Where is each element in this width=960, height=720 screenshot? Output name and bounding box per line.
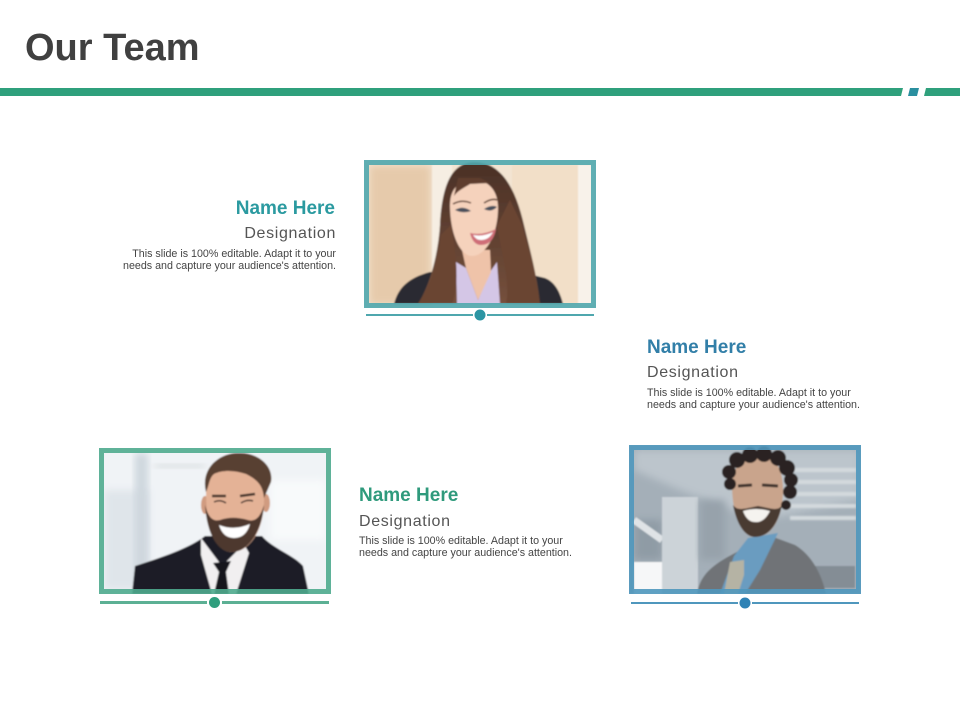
text block: member 1: [123, 198, 336, 272]
photo: woman: [364, 160, 596, 308]
text block: member 1: Designation: [244, 225, 336, 242]
photo frame: [102, 450, 328, 592]
text block: member 2: [359, 485, 572, 559]
text block: member 3: Name Here: [647, 337, 746, 358]
text block: member 3: needs and capture your audience's attention.: [647, 399, 860, 411]
text block: member 2: Designation: [359, 513, 451, 530]
connector line and dot: [100, 597, 329, 608]
team member 3 card: [629, 337, 861, 608]
text block: member 1: needs and capture your audience's attention.: [123, 260, 336, 272]
team member 2 card: [99, 448, 572, 608]
connector line and dot: [366, 310, 594, 320]
text block: member 3: Designation: [647, 364, 739, 381]
text block: member 2: Name Here: [359, 485, 458, 506]
photo: man in dark suit: [99, 448, 331, 594]
photo: man in grey suit: [629, 445, 861, 594]
title: Our Team: [25, 27, 200, 69]
connector line and dot: [631, 598, 859, 608]
text block: member 3: This slide is 100% editable. Adapt it to your: [647, 387, 851, 399]
text block: member 3: [647, 337, 860, 411]
text block: member 2: This slide is 100% editable. Adapt it to your: [359, 535, 563, 547]
photo frame: [366, 162, 594, 306]
text block: member 2: needs and capture your audience's attention.: [359, 547, 572, 559]
text block: member 1: This slide is 100% editable. Adapt it to your: [132, 248, 336, 260]
header stripe: [0, 88, 960, 96]
photo frame: [632, 448, 858, 592]
text block: member 1: Name Here: [236, 198, 335, 219]
team member 1 card: [123, 160, 596, 320]
